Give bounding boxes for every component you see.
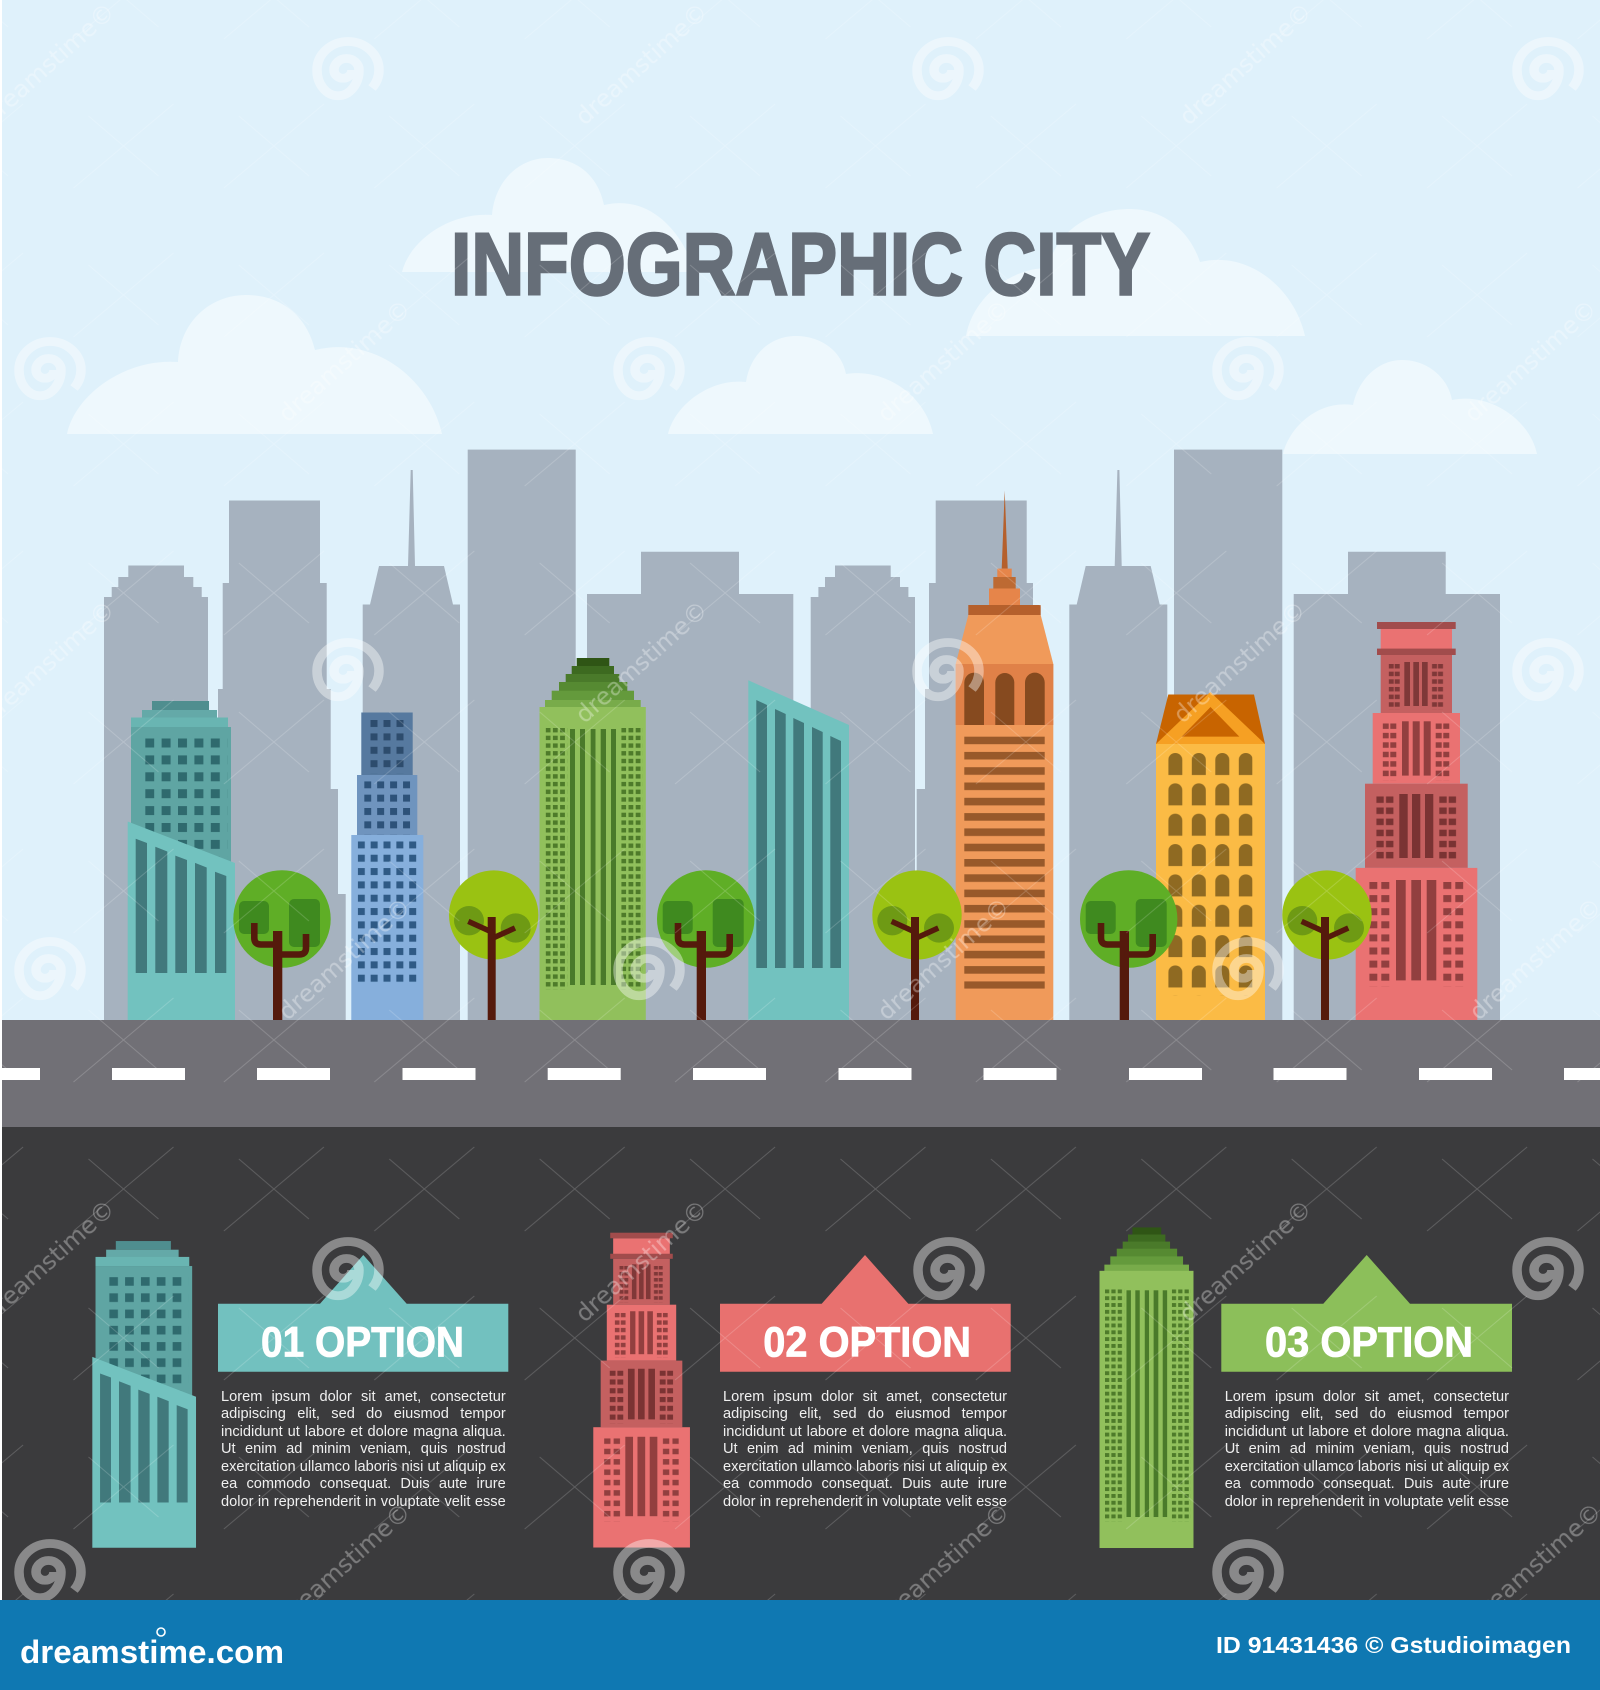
watermark text: dreamstime© <box>872 892 1015 1026</box>
option 2 body text: Ut enim ad minim veniam, quis nostrud <box>723 1441 1007 1457</box>
tree: dark green 1 <box>233 870 331 1020</box>
option 1 banner: 01 OPTION <box>261 1319 464 1367</box>
tree: lime 2 <box>872 870 962 1020</box>
watermark text: dreamstime© <box>872 1497 1015 1631</box>
building: teal slanted tower <box>748 680 849 1020</box>
option 3 body text: exercitation ullamco laboris nisi ut aliquip ex <box>1225 1459 1509 1475</box>
watermark text: dreamstime© <box>570 595 713 729</box>
option 3 body text <box>1225 1388 1509 1510</box>
tree: dark green 3 <box>1080 870 1177 1020</box>
option 2 body text <box>723 1388 1007 1510</box>
option 2 banner: 02 OPTION <box>763 1319 971 1367</box>
option 2 body text: incididunt ut labore et dolore magna aliqua. <box>723 1424 1007 1440</box>
option 1 body text: Ut enim ad minim veniam, quis nostrud <box>221 1441 506 1457</box>
watermark text: dreamstime© <box>1174 0 1317 131</box>
option 2 body text: exercitation ullamco laboris nisi ut aliquip ex <box>723 1459 1007 1475</box>
option 2 body text: Lorem ipsum dolor sit amet, consectetur <box>723 1388 1007 1404</box>
option 3 banner <box>1221 1255 1512 1372</box>
tree: lime 3 <box>1282 870 1372 1020</box>
building: red tower <box>1356 622 1477 1020</box>
option 3 building icon <box>1100 1227 1193 1548</box>
option 2 body text: adipiscing elit, sed do eiusmod tempor <box>723 1406 1007 1422</box>
footer bar: ID 91431436 © Gstudioimagen <box>1216 1632 1571 1658</box>
option 1 body text <box>221 1388 506 1510</box>
option 3 body text: ea commodo consequat. Duis aute irure <box>1225 1476 1509 1492</box>
option 3 body text: Lorem ipsum dolor sit amet, consectetur <box>1225 1388 1509 1404</box>
option 2 body text: dolor in reprehenderit in voluptate velit esse <box>723 1494 1007 1510</box>
option 1 body text: adipiscing elit, sed do eiusmod tempor <box>221 1406 506 1422</box>
watermark text: dreamstime© <box>273 892 416 1026</box>
option 2 building icon <box>593 1233 690 1548</box>
building: orange tower <box>956 490 1053 1020</box>
left edge strip <box>0 0 2 1600</box>
tree: lime 1 <box>449 870 538 1020</box>
watermark text: dreamstime© <box>570 1194 713 1328</box>
watermark text: dreamstime© <box>1174 1194 1317 1328</box>
background skyline silhouettes <box>104 450 1500 1020</box>
watermark text: dreamstime© <box>1168 595 1311 729</box>
option 3 body text: incididunt ut labore et dolore magna aliqua. <box>1225 1424 1509 1440</box>
sky background <box>0 0 1600 1030</box>
building: yellow tower <box>1156 692 1265 1020</box>
watermark text: dreamstime© <box>273 1497 416 1631</box>
option 3 body text: Ut enim ad minim veniam, quis nostrud <box>1225 1441 1509 1457</box>
watermark text: dreamstime© <box>1459 294 1600 428</box>
building: teal tower <box>128 701 235 1020</box>
watermark text: dreamstime© <box>570 0 713 131</box>
option 1 body text: Lorem ipsum dolor sit amet, consectetur <box>221 1388 506 1404</box>
tree: dark green 2 <box>657 870 754 1020</box>
dark options panel <box>0 1127 1600 1600</box>
option 1 banner <box>218 1255 508 1372</box>
watermark text: dreamstime© <box>273 294 416 428</box>
clouds <box>67 158 1537 454</box>
road <box>0 1020 1600 1127</box>
option 2 banner <box>720 1255 1011 1372</box>
option 2 body text: ea commodo consequat. Duis aute irure <box>723 1476 1007 1492</box>
option 3 body text: dolor in reprehenderit in voluptate velit esse <box>1225 1494 1509 1510</box>
building: green tower <box>540 658 646 1020</box>
option 1 body text: exercitation ullamco laboris nisi ut aliquip ex <box>221 1459 506 1475</box>
option 1 building icon <box>92 1241 196 1548</box>
option 1 body text: ea commodo consequat. Duis aute irure <box>221 1476 506 1492</box>
title: INFOGRAPHIC CITY <box>451 214 1150 314</box>
option 3 banner: 03 OPTION <box>1265 1319 1473 1367</box>
footer bar: dreamstime.com <box>20 1634 284 1670</box>
option 1 body text: dolor in reprehenderit in voluptate velit esse <box>221 1494 506 1510</box>
footer bar <box>0 1600 1600 1690</box>
building: blue tower <box>351 712 423 1020</box>
watermark text: dreamstime© <box>872 294 1015 428</box>
option 3 body text: adipiscing elit, sed do eiusmod tempor <box>1225 1406 1509 1422</box>
option 1 body text: incididunt ut labore et dolore magna aliqua. <box>221 1424 506 1440</box>
